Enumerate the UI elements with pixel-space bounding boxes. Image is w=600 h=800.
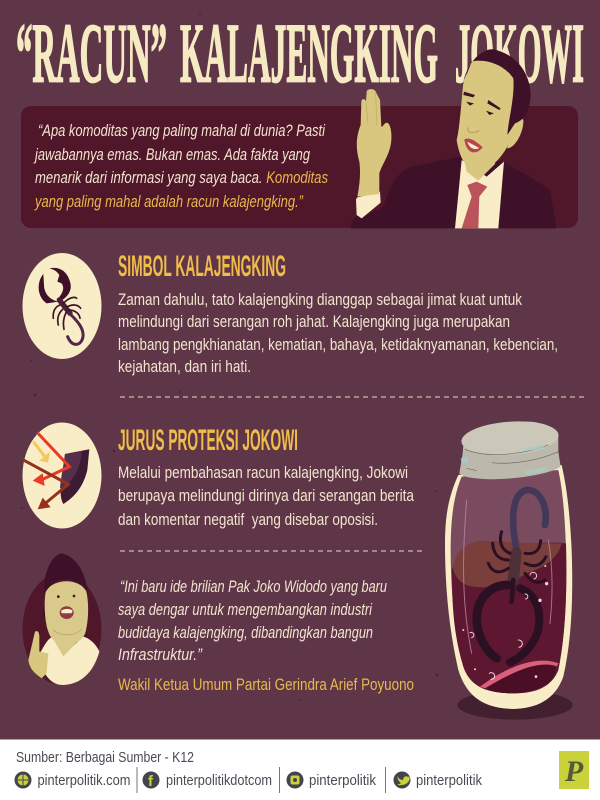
text: SIMBOL KALAJENGKING — [118, 250, 286, 283]
social: website — [14, 772, 130, 789]
footer — [0, 739, 600, 800]
quote: Arief Poyuono: saya dengar untuk mengembangkan industri — [118, 600, 373, 619]
social: facebook: f — [148, 773, 154, 790]
text: Simbol paragraph — [118, 290, 558, 376]
text: Jurus paragraph — [118, 463, 414, 529]
icon: shield deflecting arrows — [22, 422, 102, 528]
quote: Arief Poyuono — [118, 577, 387, 664]
illustration: Jokowi with raised hand — [351, 49, 557, 228]
text: Simbol paragraph: melindungi dari serangan roh jahat. Kalajengking juga merupakan — [118, 312, 510, 331]
quote text: “Apa komoditas yang paling mahal di dunia? Pasti — [38, 121, 326, 140]
quote text — [33, 121, 328, 211]
illustration: scorpion in jar — [445, 418, 573, 720]
source: Sumber: Berbagai Sumber - K12 — [16, 749, 194, 766]
text: Simbol paragraph: kejahatan, dan iri hati. — [118, 357, 251, 376]
social: facebook — [142, 772, 272, 790]
panel: quote — [21, 106, 578, 228]
quote text: menarik dari informasi yang saya baca. Komoditas — [35, 168, 328, 187]
quote: Arief Poyuono: “Ini baru ide brilian Pak Joko Widodo yang baru — [120, 577, 387, 596]
social: instagram — [286, 772, 376, 789]
text: Jurus paragraph: berupaya melindungi dirinya dari serangan berita — [118, 486, 414, 505]
quote: Arief Poyuono: Infrastruktur.” — [118, 645, 203, 664]
social: instagram: pinterpolitik — [309, 772, 376, 789]
attribution: Wakil Ketua Umum Partai Gerindra Arief Poyuono — [118, 675, 414, 694]
text: Jurus paragraph: dan komentar negatif yang disebar oposisi. — [118, 510, 378, 529]
social: facebook: pinterpolitikdotcom — [166, 772, 272, 789]
quote: Arief Poyuono: budidaya kalajengking, dibandingkan bangun — [118, 623, 373, 642]
portrait: Arief Poyuono — [22, 553, 102, 685]
quote text: jawabannya emas. Bukan emas. Ada fakta yang — [33, 145, 310, 164]
icon: scorpion — [22, 253, 102, 359]
logo — [559, 751, 589, 789]
quote text: yang paling mahal adalah racun kalajengking.” — [34, 192, 304, 211]
text: JURUS PROTEKSI JOKOWI — [118, 424, 298, 457]
title: “RACUN” — [16, 6, 167, 100]
title — [16, 6, 584, 100]
logo: P — [564, 755, 584, 788]
text: Jurus paragraph: Melalui pembahasan racun kalajengking, Jokowi — [118, 463, 408, 482]
social: website: pinterpolitik.com — [38, 772, 130, 789]
social: twitter — [394, 772, 482, 789]
social: twitter: pinterpolitik — [416, 772, 482, 789]
